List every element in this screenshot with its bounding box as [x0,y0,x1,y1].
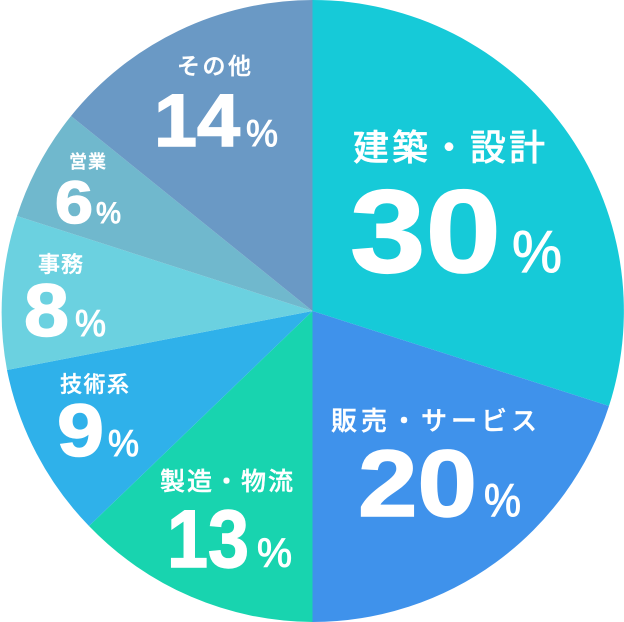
value: 8: 8 [24,269,69,352]
label: manufacturing and logistics: 製造・物流 [160,468,295,496]
label: office work: 事務 [38,252,84,277]
percent sign: % [246,113,278,155]
slice: other 14% [71,0,312,311]
label: sales and service: 販売・サービス [331,406,541,436]
value: 30: 30 [350,166,501,298]
percent sign: % [512,219,562,285]
value: 14: 14 [154,79,240,162]
value: 6: 6 [55,169,93,236]
value: 20: 20 [358,431,477,537]
slice: sales and service 20% [312,311,609,622]
label: other: その他 [177,53,254,79]
percent sign: % [108,423,139,464]
value: 9: 9 [57,389,104,472]
slice: construction and design 30% [312,0,624,406]
percent sign: % [257,530,292,576]
label: business: 営業 [69,152,107,172]
slice: office work 8% [2,216,313,370]
percent sign: % [484,474,521,526]
value: 13: 13 [167,494,249,585]
label: construction and design: 建築・設計 [353,127,548,168]
slice: technical 9% [7,311,312,526]
slice: sales office 6% [17,116,312,311]
label: technical: 技術系 [60,372,131,397]
slice: manufacturing and logistics 13% [89,311,312,622]
percent sign: % [96,197,121,230]
percent sign: % [75,303,106,344]
